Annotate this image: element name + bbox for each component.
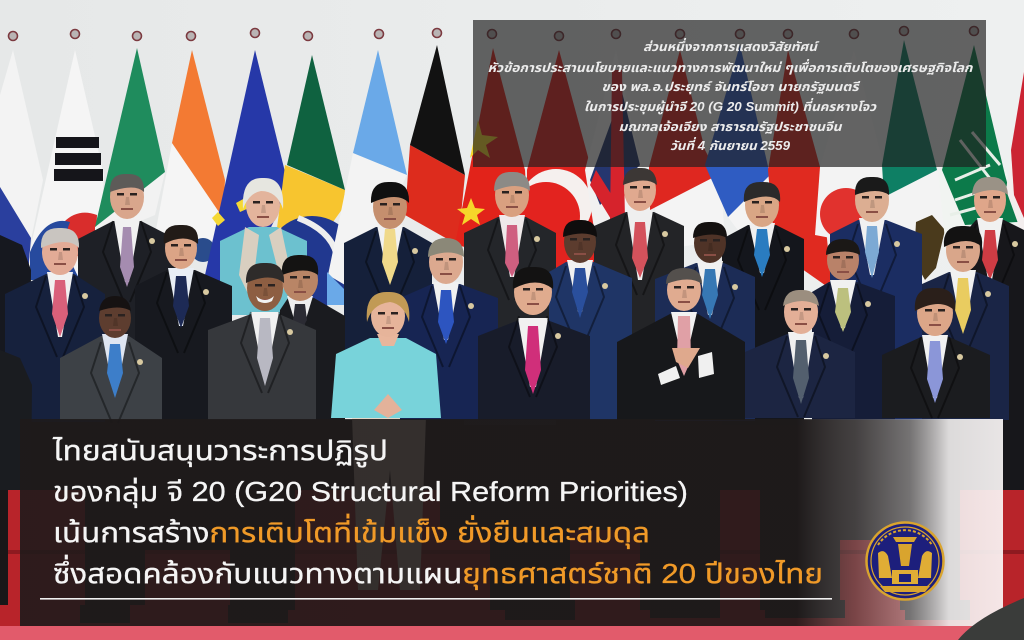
person: Hollande [882,288,990,418]
person: Xi [478,267,590,420]
person: Kim [830,177,922,420]
person: Erdogan [617,268,745,420]
person: Nazarbayev [400,238,498,420]
caption text: มณฑลเจ้อเจียง สาธารณรัฐประชาชนจีน [618,120,843,134]
flag: Mexico [870,40,952,285]
person: Zuma [60,296,162,423]
person: Azevedo [78,174,176,417]
flag: Saudi Arabia [938,45,1024,240]
person: Prayut [344,182,432,417]
person: left edge front [0,350,32,490]
person: Abe [922,226,1009,420]
flag: right edge red [1006,65,1024,240]
flag: Argentina [327,50,407,305]
person: Ban [722,182,804,425]
person: Lee [464,172,556,425]
flag: European Union [205,50,285,300]
middle row leaders [5,220,1009,422]
flag: white and blue left edge [0,50,43,275]
person: Lagarde [220,178,307,315]
person: Sall [655,222,755,421]
caption text: ส่วนหนึ่งจากการแสดงวิสัยทัศน์ [643,38,820,54]
panel: headline overlay [20,419,1003,626]
legs and shoes [0,420,1024,623]
flag: South Korea [28,50,104,280]
flag row [0,26,1024,308]
flag: United Kingdom [585,50,652,255]
foreground blurred head, bottom right [958,598,1024,640]
floor [0,420,1024,640]
flag: Brazil [266,55,358,308]
person: Ryder [966,177,1024,490]
caption text: ของ พล.อ.ประยุทธ์ จันทร์โอชา นายกรัฐมนตรี [602,80,861,95]
person: Sisi [812,239,895,420]
caption text: หัวข้อการประสานนโยบายและแนวทางการพัฒนาใหม่ ๆเพื่อการเติบโตของเศรษฐกิจโลก [488,59,974,75]
caption text: ในการประชุมผู้นำจี 20 (G 20 Summit) ที่นครหางโจว [584,98,877,115]
flag: Japan [815,50,895,250]
icon: government seal [866,522,944,600]
headline text: เน้นการสร้าง การเติบโตที่เข้มแข็ง ยั่งยืนและสมดุล [53,513,650,549]
person: Obama [208,263,316,420]
person: Déby [549,220,632,420]
panel: speech caption [473,20,986,167]
headline text: ไทยสนับสนุนวาระการปฏิรูป [52,435,388,468]
flag: green and white [95,48,165,240]
person: Rajoy [594,168,684,420]
person: Bounnhang [280,255,345,420]
flag: red flag [768,50,832,290]
flag: Germany [405,45,465,245]
Merkel trousers [352,416,426,590]
person: Merkel [331,292,441,418]
person: left edge back [0,235,31,420]
headline text: ของกลุ่ม จี 20 (G20 Structural Reform Priorities) [53,476,688,508]
flag: India [155,50,225,262]
headline underline [40,598,832,600]
flag: China [455,48,530,260]
flag: France [705,45,778,260]
caption text: วันที่ 4 กันยายน 2559 [670,137,790,153]
front row leaders [0,263,990,490]
flag: Canada [649,50,725,250]
caption text [488,38,974,153]
flag pole finials [8,26,978,40]
person: Renzi [135,225,232,420]
headline text: ซึ่งสอดคล้องกับแนวทางตามแผน ยุทธศาสตร์ชาติ 20 ปีของไทย [53,554,823,590]
headline text [52,435,823,590]
person: Turnbull [5,228,105,422]
flag: Turkey [512,50,597,270]
person: Putin [745,290,855,418]
back row leaders [0,168,1024,490]
